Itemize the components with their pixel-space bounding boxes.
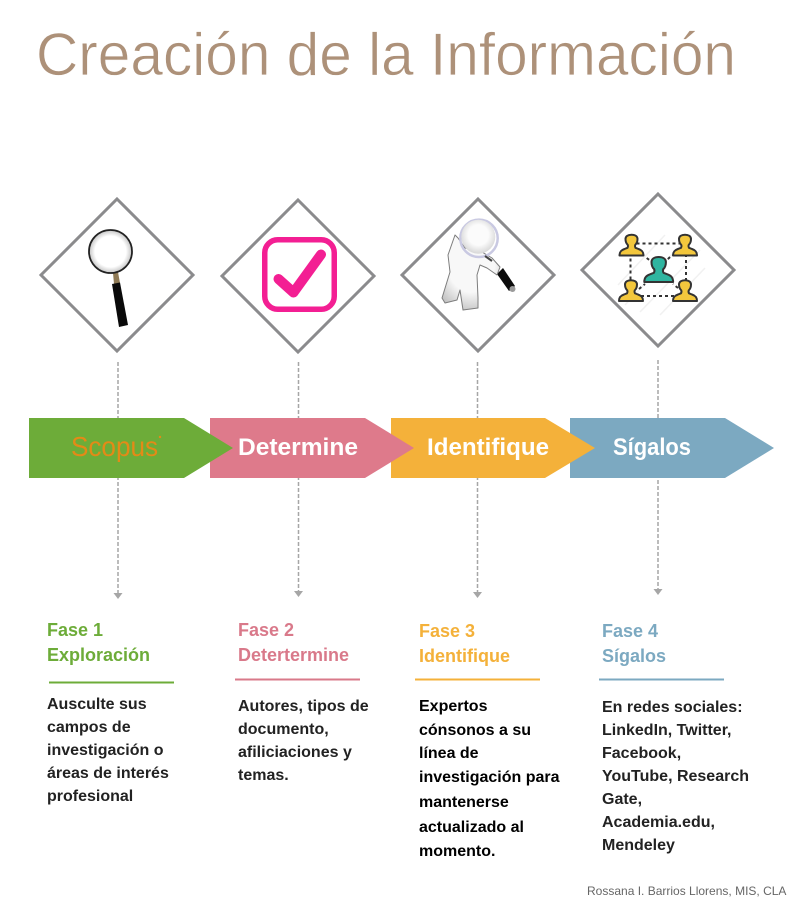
body: Fase 3: cónsonos a su bbox=[419, 722, 531, 739]
body: Fase 2: Autores, tipos de bbox=[238, 698, 369, 715]
body: Fase 3: línea de bbox=[419, 745, 479, 762]
body: Fase 4: En redes sociales: bbox=[602, 699, 743, 716]
body: Fase 4: Gate, bbox=[602, 791, 642, 808]
body: Fase 4: YouTube, Research bbox=[602, 768, 749, 785]
body: Fase 1: profesional bbox=[47, 788, 133, 805]
arrow: Identifique bbox=[391, 418, 595, 478]
body: Fase 1: Ausculte sus bbox=[47, 696, 147, 713]
body: Fase 2: afiliciaciones y bbox=[238, 744, 352, 761]
arrow: Sígalos: Sígalos bbox=[613, 434, 691, 461]
body: Fase 4: Facebook, bbox=[602, 745, 681, 762]
body: Fase 4: Mendeley bbox=[602, 837, 675, 854]
arrow: Determine bbox=[210, 418, 414, 478]
body: Fase 3: momento. bbox=[419, 843, 495, 860]
heading: Fase 1: Exploración bbox=[47, 645, 150, 665]
body: Fase 3: Expertos bbox=[419, 698, 488, 715]
icon 2: diamond with pink checkbox bbox=[222, 200, 374, 352]
heading: Fase 3: Identifique bbox=[419, 646, 510, 666]
icon 4: diamond with network of people bbox=[582, 194, 734, 346]
heading: Fase 3: Fase 3 bbox=[419, 621, 475, 641]
heading: Fase 2: Fase 2 bbox=[238, 620, 294, 640]
body: Fase 2: documento, bbox=[238, 721, 329, 738]
arrow: Identifique: Identifique bbox=[427, 434, 549, 461]
body: Fase 1: áreas de interés bbox=[47, 765, 169, 782]
body: Fase 3: mantenerse bbox=[419, 794, 509, 811]
icon 1: diamond with magnifying glass bbox=[41, 199, 193, 351]
heading: Fase 4: Sígalos bbox=[602, 646, 666, 666]
arrow: Scopus: Scopus bbox=[71, 431, 158, 462]
heading: Fase 1: Fase 1 bbox=[47, 620, 103, 640]
panel: Fase 1 bbox=[47, 620, 174, 805]
arrow: Scopus bbox=[29, 418, 233, 478]
body: Fase 4: Academia.edu, bbox=[602, 814, 715, 831]
credit: Rossana I. Barrios Llorens, MIS, CLA bbox=[587, 884, 786, 898]
panel: Fase 2 bbox=[235, 620, 369, 784]
body: Fase 2: temas. bbox=[238, 767, 289, 784]
icon 3: diamond with 3D figure and magnifier bbox=[402, 199, 554, 351]
heading: Fase 2: Detertermine bbox=[238, 645, 349, 665]
body: Fase 3: actualizado al bbox=[419, 819, 524, 836]
panel: Fase 4 bbox=[599, 621, 749, 854]
dashed connectors bbox=[118, 360, 658, 593]
title: Creación de la Información bbox=[36, 21, 736, 88]
heading: Fase 4: Fase 4 bbox=[602, 621, 658, 641]
arrow: Sígalos bbox=[570, 418, 774, 478]
panel: Fase 3 bbox=[415, 621, 560, 860]
body: Fase 3: investigación para bbox=[419, 769, 560, 786]
body: Fase 1: campos de bbox=[47, 719, 131, 736]
arrow: Determine: Determine bbox=[238, 434, 358, 461]
body: Fase 1: investigación o bbox=[47, 742, 164, 759]
connector arrowheads bbox=[114, 589, 662, 599]
body: Fase 4: LinkedIn, Twitter, bbox=[602, 722, 732, 739]
